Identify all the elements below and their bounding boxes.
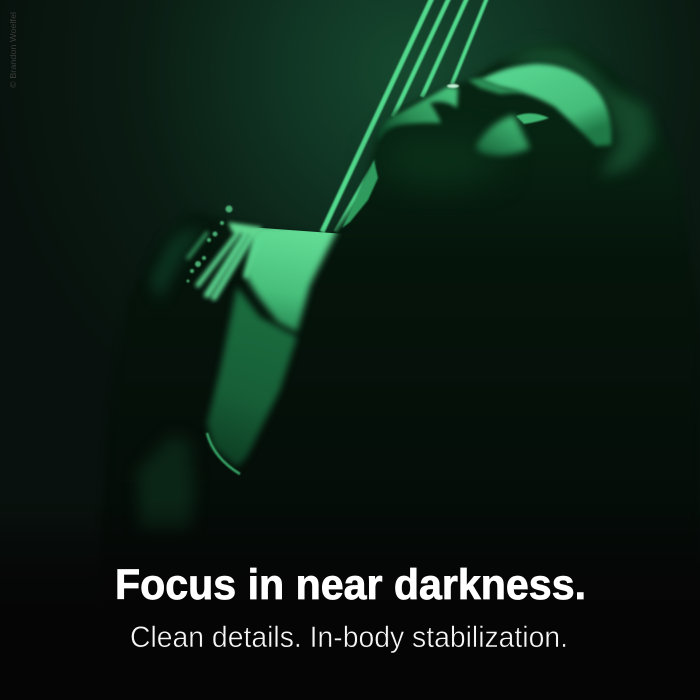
subtitle: Clean details. In-body stabilization.: [130, 621, 568, 654]
under-face glow: [380, 135, 500, 185]
nose tip glare: [447, 84, 459, 88]
bottom fade: [0, 500, 700, 620]
fringe garment: [188, 222, 262, 298]
nose and lips: [378, 87, 458, 142]
forehead: [480, 64, 611, 146]
bottom band: [0, 620, 700, 700]
nose ridge: [468, 78, 525, 94]
upper arm glow: [150, 228, 200, 300]
lower body glow: [137, 436, 195, 530]
title: Focus in near darkness.: [115, 561, 586, 609]
arm: [207, 287, 297, 467]
eye highlight: [516, 113, 549, 124]
cheek: [476, 115, 530, 155]
chest highlight: [245, 225, 340, 332]
arm rim light: [207, 433, 240, 474]
face highlights: [378, 64, 611, 155]
hair: [497, 45, 653, 177]
laser light beams: [322, 0, 487, 232]
neck rim light: [342, 160, 378, 228]
photo credit: © Brandon Woelfel: [8, 12, 18, 88]
bead trim: [186, 206, 232, 282]
